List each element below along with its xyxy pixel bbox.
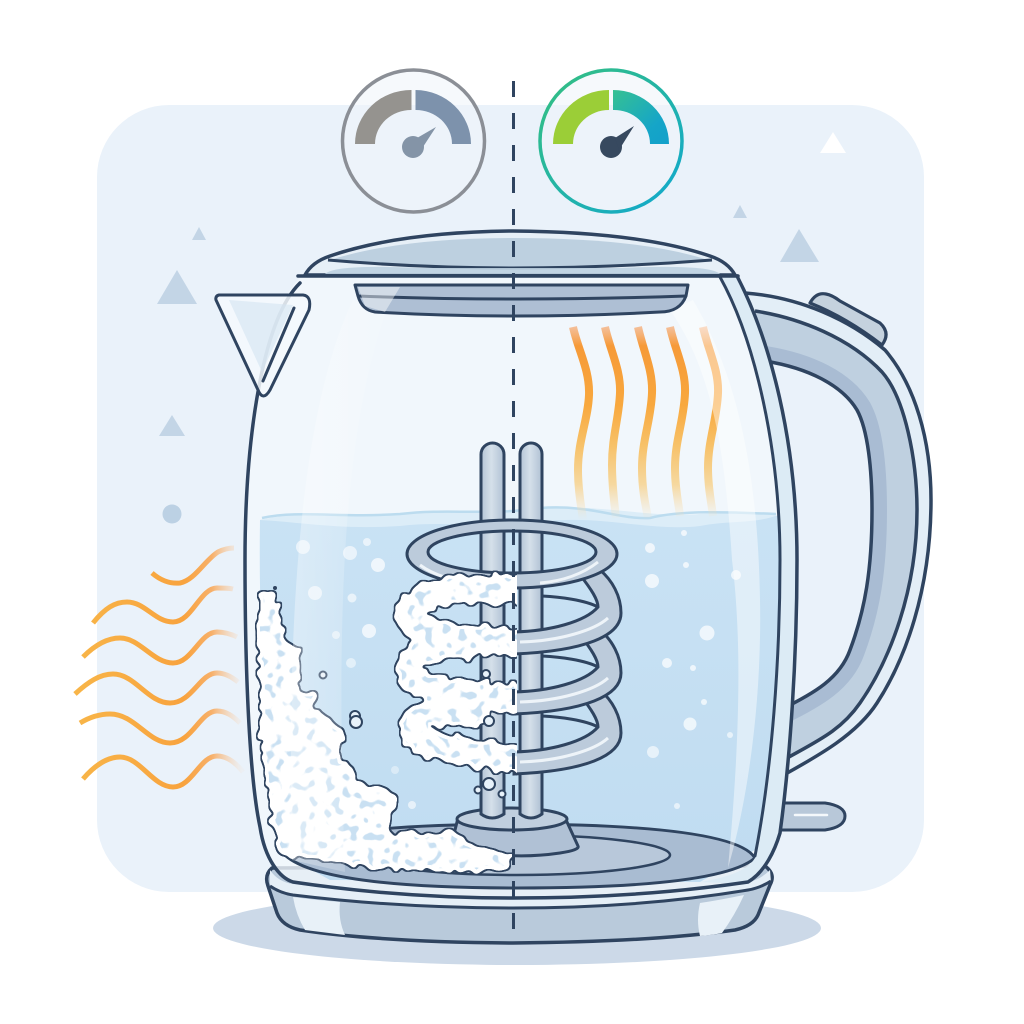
kettle base: [267, 866, 772, 943]
scale flakes: [273, 586, 506, 798]
water surface band: [260, 507, 778, 527]
decorative triangles and dot: [157, 132, 846, 524]
water: [260, 511, 779, 882]
limescale on kettle wall and floor: [260, 592, 510, 870]
ground shadow: [213, 891, 821, 965]
rising heat waves: [573, 327, 718, 520]
coil turn three: [514, 630, 621, 714]
handle button: [810, 294, 886, 345]
kettle glass body fill: [245, 278, 797, 898]
glass highlights: [291, 300, 760, 872]
kettle lid: [305, 231, 735, 275]
gauge: after, high efficiency: [540, 70, 682, 212]
bubbles: [296, 530, 741, 809]
incoming heat waves: [75, 548, 243, 787]
lid strainer: [355, 285, 688, 316]
top coil ring: [407, 520, 617, 588]
background panel: [97, 105, 924, 892]
kettle handle: [745, 293, 931, 777]
heating plate: [285, 824, 755, 888]
clean coil right half and top ring: [407, 520, 621, 774]
kettle body outline: [245, 276, 797, 898]
coil turn two: [514, 570, 621, 654]
heating element base: [453, 790, 578, 856]
coil turn four: [514, 690, 621, 774]
gauge: before, low efficiency: [342, 70, 484, 212]
limescale on coil: [409, 589, 530, 762]
spout: [216, 295, 310, 396]
center dashed divider: [512, 81, 515, 945]
heating element rods: [481, 443, 542, 819]
switch lever: [780, 803, 845, 830]
